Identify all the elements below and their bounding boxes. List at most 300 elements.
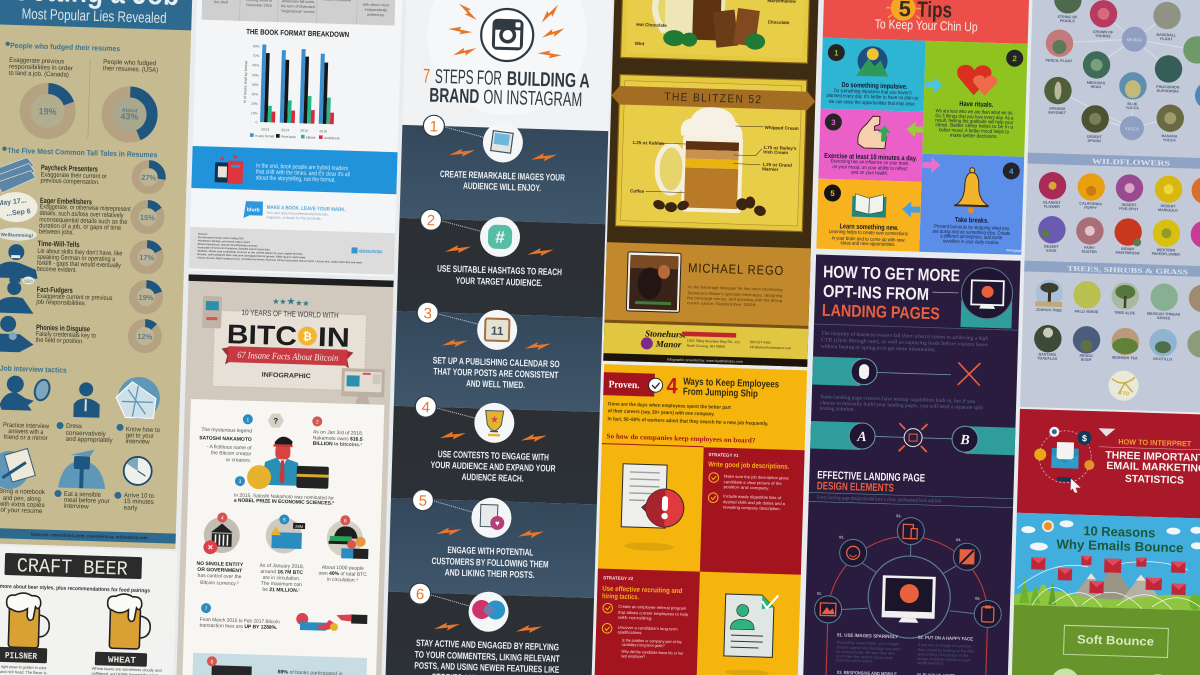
- sources block: Pew Research Center, book reading 2016: [198, 236, 244, 240]
- text: fact 5: As of January 2018,: [260, 563, 304, 570]
- plant labels: wildflowers: SAGE: [1046, 249, 1057, 253]
- step 2: USE SUITABLE HASHTAGS TO REACH: [437, 262, 562, 277]
- text: tactic 2: and appropriately: [66, 436, 113, 444]
- subtitle: Most Popular Lies Revealed: [21, 6, 167, 27]
- text: canada stat: Exaggerate previous: [9, 57, 65, 66]
- text: tactic 3: [116, 424, 160, 446]
- fact 6 icon: 6: [344, 518, 347, 524]
- chart legend: Audiobook: [324, 136, 340, 140]
- chart legend: Print book: [281, 135, 296, 139]
- plant labels: wildflowers: DESERT: [1044, 245, 1060, 249]
- icon: fact fudger figure: SEO: [24, 278, 33, 284]
- panel: instagram: [385, 0, 614, 675]
- fact 5 icon: 5: [283, 517, 286, 523]
- plant labels: succulents: PENCIL PLANT: [1046, 58, 1073, 63]
- text: usa stat: [103, 59, 158, 74]
- donut: 43 percent: About: [122, 108, 138, 114]
- node numbers: [817, 512, 983, 601]
- plant labels: wildflowers: BLANKET: [1043, 200, 1062, 205]
- title: [683, 377, 780, 400]
- title: [822, 262, 960, 324]
- step 5: CUSTOMERS BY FOLLOWING THEM: [431, 555, 549, 570]
- icon: resume check: [723, 594, 778, 675]
- wood bio panel: [604, 242, 811, 329]
- icon: man with mirror: [0, 375, 52, 411]
- card: hot chocolate: Chocolate: [768, 19, 790, 25]
- step 1: 1: [429, 118, 438, 135]
- donut: 17 percent: [133, 244, 160, 271]
- step 4: AUDIENCE REACH.: [462, 471, 524, 484]
- plant labels: wildflowers: DESERT: [1121, 203, 1137, 207]
- button: soft bounce: [1064, 625, 1168, 657]
- sources block: Association of American Publishers, StatShot annual report data: [198, 246, 270, 251]
- icon: phone: [202, 296, 222, 328]
- heading: bitcoin: ₿: [303, 331, 312, 343]
- callout text: In the end, book people are hybrid readers: [256, 162, 348, 172]
- text: tactic 6: [114, 492, 155, 512]
- plant labels: wildflowers: WESTERN: [1157, 248, 1176, 253]
- fact 3: In 2015, Satoshi Nakamoto was nominated for: [234, 493, 334, 502]
- plant labels: succulents: HEAD: [1091, 85, 1101, 89]
- node 4: [953, 543, 981, 571]
- strategy 2 red cell: Uncover a candidate's long-term: [618, 625, 678, 632]
- section heading: [817, 469, 925, 495]
- plant labels: wildflowers: INDIAN: [1121, 247, 1134, 251]
- text: fact 6: About 1000 people: [322, 565, 364, 572]
- sources band: [0, 527, 176, 544]
- contact: North Conway, NH 03860: [687, 344, 725, 349]
- proven tag: [603, 372, 655, 397]
- icon: welcoming figure: [0, 227, 39, 279]
- stars: [272, 296, 310, 308]
- a b test graphic: [810, 420, 1015, 455]
- blurb logo and slogan: blurb: [247, 207, 260, 214]
- text: usa stat: their resumes. (USA): [103, 65, 158, 74]
- bar chart: 20%: [251, 102, 258, 106]
- fact 2: 2: [316, 419, 319, 425]
- text: fact 6: own 40% of total BTC: [318, 571, 367, 578]
- bar chart: 2014: [281, 128, 289, 132]
- teal bar with mouse to cross: [812, 357, 980, 390]
- donut: 43 percent: [106, 91, 153, 138]
- text: fact 4: Bitcoin currency.³: [200, 580, 239, 587]
- step 5: ♥: [495, 519, 500, 528]
- plant labels: trees: BUSH: [1081, 358, 1092, 362]
- plant labels: trees: JOSHUA TREE: [1036, 308, 1062, 313]
- step 2: YOUR TARGET AUDIENCE.: [456, 275, 543, 288]
- element descriptions: target audience.: [917, 661, 944, 666]
- tip 1: 1: [834, 49, 839, 58]
- icon: date bubble: [0, 191, 38, 223]
- strategy 1 red cell: [700, 447, 805, 575]
- sources block: Sources:: [198, 233, 208, 236]
- fact 4 icon: 4: [221, 516, 224, 522]
- stats table: the term of illustrated: [281, 4, 315, 9]
- step 3: SET UP A PUBLISHING CALENDAR SO: [433, 354, 560, 369]
- arrow: blue: [902, 201, 920, 218]
- node numbers: 02.: [839, 535, 844, 540]
- strategy 1 red cell: STRATEGY #1: [708, 452, 739, 458]
- tip 2: better mood. A better mood helps to: [939, 127, 1009, 135]
- text: tactic 1: friend or a mirror: [4, 434, 49, 442]
- fact 2: BILLION in bitcoins.¹: [313, 441, 362, 448]
- plant labels: succulents: [1043, 14, 1182, 146]
- icon: clock sun: [1042, 520, 1054, 532]
- heading plate: craft beer: CRAFT BEER: [16, 555, 128, 582]
- content sheet: [182, 399, 384, 675]
- tip 2: Have rituals.: [959, 101, 993, 109]
- title: LANDING PAGES: [822, 301, 940, 323]
- item: time will tells: Lie about skills they don't have, like: [37, 248, 123, 257]
- stats table: "Inspirational" section: [281, 9, 315, 14]
- coffee beans: [652, 194, 768, 218]
- stats table: the shelf: [214, 0, 228, 4]
- tip 5: Learning helps to create new connections: [829, 229, 908, 237]
- node numbers: 03.: [896, 514, 902, 518]
- step 2: #: [495, 228, 506, 247]
- hexagon question mark: [268, 413, 284, 428]
- item: phonies in disguise: the field or position.: [36, 337, 84, 345]
- hills: [1014, 590, 1200, 611]
- title: 7: [423, 65, 430, 88]
- contact: 800 527-4161: [750, 340, 771, 345]
- item: fact fudgers: [35, 285, 113, 308]
- fact 5 icon: 29M: [295, 524, 303, 529]
- tip 3: Exercising has an influence on your brain,: [830, 158, 910, 167]
- fact 3: 3: [238, 479, 242, 485]
- drink labels: Coffee: [630, 188, 645, 194]
- item: paycheck presenters: previous compensation.: [40, 177, 100, 186]
- plant labels: succulents: YUCCA: [1163, 138, 1176, 143]
- credit strip: [603, 353, 807, 367]
- label: wheat: WHEAT: [108, 655, 137, 666]
- bio: [687, 284, 783, 308]
- bio: As the Beverage Manager he has been developing: [688, 284, 783, 292]
- plants: trees: [1034, 279, 1200, 358]
- fact 1: 1: [246, 417, 250, 423]
- item: eager embellishers: [39, 196, 131, 238]
- plant labels: trees: PALO VERDE: [1075, 309, 1099, 314]
- step 2: [419, 209, 564, 289]
- icon: monitor: [341, 368, 385, 404]
- sources band: Sources: newstimes.com, newswire.ca, edstudent.com: [31, 532, 148, 540]
- plant labels: trees: TREE ALOE: [1114, 311, 1136, 315]
- title: BUILDING A: [507, 68, 590, 93]
- envelopes: [1030, 554, 1187, 596]
- item: paycheck presenters: [40, 163, 108, 186]
- panel: stonehurst beverages: [603, 0, 819, 367]
- step 5: ENGAGE WITH POTENTIAL: [447, 544, 534, 558]
- text: tactic 3: get to your: [126, 432, 155, 440]
- strategy 1 red cell: Write good job descriptions.: [708, 461, 789, 471]
- plant labels: succulents: PLANT: [1160, 37, 1173, 41]
- subheading: To Keep Your Chin Up: [874, 16, 978, 34]
- stats table: December 2016: [246, 3, 272, 8]
- strategy 1 red cell: Include easily digestible lists of: [723, 493, 782, 500]
- bio: room since September 2008.: [687, 300, 757, 307]
- stars: ★: [279, 297, 287, 306]
- label: infographic: INFOGRAPHIC: [262, 372, 311, 380]
- element descriptions: 02. PUT ON A HAPPY FACE: [918, 635, 973, 642]
- step 5: 5: [418, 493, 427, 510]
- plant labels: succulents: BASEBALL: [1156, 33, 1177, 37]
- icon: envelope orbit: [1033, 426, 1115, 494]
- step 4: USE CONTESTS TO ENGAGE WITH: [438, 448, 549, 462]
- bar chart: 40%: [252, 83, 259, 87]
- element descriptions: image should be similar to your: [917, 657, 971, 662]
- plant labels: wildflowers: DUSTER: [1082, 250, 1097, 254]
- fact 4 icon: [203, 512, 240, 555]
- plant labels: succulents: EUPHORBIA: [1157, 89, 1179, 94]
- drink labels: [630, 121, 799, 198]
- text: tactic 5: Eat a sensible: [64, 491, 101, 499]
- panel: getting a job: [0, 0, 193, 549]
- title plate: [212, 310, 367, 391]
- panel: 5 tips: [816, 0, 1030, 255]
- element descriptions: If you use an image of a person,: [918, 643, 972, 649]
- heading: bitcoin: IN: [317, 322, 350, 353]
- text: tactic 2: [56, 422, 114, 444]
- sign: the blitzen 52: [611, 86, 816, 110]
- strategy 2 red cell: last employer?: [621, 653, 646, 659]
- item: eager embellishers: inconsequential details such as the: [39, 216, 128, 226]
- fact 2: [312, 416, 364, 448]
- strategy 1 red cell: desired skills and job duties and a: [723, 499, 786, 506]
- icon: clock: [123, 457, 152, 485]
- strategy 1 red cell: position and company.: [723, 484, 770, 491]
- item: paycheck presenters: Paycheck Presenters: [41, 163, 98, 174]
- plant labels: succulents: YUCCA: [1126, 106, 1139, 110]
- text: tactic 1: Practice interview: [3, 422, 49, 430]
- item: phonies in disguise: [36, 323, 96, 346]
- button: soft bounce: Soft Bounce: [1077, 632, 1155, 649]
- plants: succulents: [1043, 0, 1200, 136]
- text: canada stat: [9, 57, 74, 79]
- element descriptions: should support the message you want: [837, 645, 902, 651]
- hexagon question mark: ?: [273, 417, 278, 426]
- fact 7: [199, 603, 280, 631]
- text: beer notes: Wheat beers are sometimes cloudy and: [92, 667, 162, 673]
- bar chart: 2016: [319, 129, 327, 134]
- band: trees shrubs grass: TREES, SHRUBS & GRASS: [1067, 265, 1188, 276]
- section heading: EFFECTIVE LANDING PAGE: [817, 469, 925, 485]
- step 2: 2: [427, 212, 435, 229]
- strategy 2 red cell: with recruiting.: [618, 615, 653, 621]
- icon: pilsner mug: [5, 593, 50, 648]
- contact: [687, 338, 792, 351]
- section heading: job interview tactics: Job Interview tactics: [0, 364, 67, 375]
- step 5: [410, 489, 551, 581]
- icon: monitor badge: [960, 267, 1013, 329]
- step 6: [407, 583, 562, 675]
- strategy 2 red cell: Use effective recruiting and: [602, 586, 682, 595]
- tip 5: [822, 184, 910, 248]
- title: [1056, 522, 1184, 555]
- plant labels: wildflowers: [1042, 200, 1182, 257]
- panel: email bounce: [1011, 513, 1200, 675]
- step 3: AND WELL TIMED.: [466, 377, 525, 390]
- question: So how do companies keep employees on board?: [606, 432, 756, 445]
- plant labels: trees: MEXICAN THREAD: [1147, 312, 1181, 317]
- bar chart: 10%: [251, 111, 258, 115]
- stars: ★: [286, 296, 296, 308]
- hub: spurge: [1121, 26, 1147, 52]
- ribbon: [221, 346, 354, 368]
- plant labels: succulents: BAYONET: [1048, 111, 1067, 115]
- card: hot chocolate: [621, 0, 810, 63]
- header band: [0, 0, 193, 30]
- text: tactic 4: and pen, along: [3, 495, 41, 503]
- item: time will tells: speaking German or operating a: [37, 254, 116, 263]
- element descriptions: and smiling. The person in the: [917, 652, 968, 658]
- step 5: AND LIKING THEIR POSTS.: [445, 566, 535, 580]
- item: eager embellishers: between jobs.: [39, 228, 74, 236]
- intro text: without buying or opting in to get more information.: [821, 343, 936, 353]
- sources block: Statista, ebook and audiobook revenue in the United States by year, digital formats: [197, 250, 303, 256]
- bar chart: 70%: [253, 54, 259, 58]
- bar chart: 0: [255, 120, 258, 124]
- item: time will tells: [37, 239, 123, 275]
- bar chart: % of books read by format: [243, 61, 248, 103]
- node 2: [839, 539, 867, 567]
- logo: [641, 328, 686, 351]
- tip 1: planned every day. It's better to have no plan so: [826, 93, 919, 102]
- logo: ftd: [1108, 370, 1139, 401]
- step 4: ★: [490, 415, 499, 426]
- badge: sun: [886, 0, 923, 22]
- item: eager embellishers: Eager Embellishers: [40, 196, 92, 206]
- tip 4: Take breaks.: [955, 217, 989, 225]
- strategy 2 red cell: Create an employee referral program: [618, 604, 687, 611]
- kicker: HOW TO INTERPRET: [1118, 437, 1192, 448]
- tip 5: 5: [830, 189, 835, 198]
- chart legend: In any format: [255, 134, 274, 138]
- plant labels: trees: TOADFLAX: [1037, 356, 1058, 361]
- element descriptions: don't take the visitor's focus away: [836, 654, 893, 660]
- split test text: [820, 393, 984, 417]
- clouds: [1021, 519, 1200, 556]
- plant labels: succulents: DESERT: [1087, 135, 1103, 139]
- heading: bitcoin: [226, 319, 350, 353]
- text: fact 4: [196, 561, 244, 587]
- text: tactic 6: 15 minutes: [124, 498, 155, 506]
- text: canada stat: to land a job. (Canada): [9, 70, 69, 79]
- strategy 2 red cell: that allows current employees to help: [618, 610, 689, 617]
- icon: money: [0, 157, 36, 194]
- step 4: [413, 396, 558, 485]
- drink labels: 1.25 oz Kahlua: [632, 140, 664, 146]
- tip 4: Venngage: [1006, 248, 1022, 253]
- photo: [626, 252, 681, 312]
- text: tactic 5: interview: [63, 503, 89, 510]
- bounce arcs: [1017, 558, 1200, 611]
- label: pilsner: [0, 646, 47, 663]
- strategy 2 red cell: [595, 569, 700, 675]
- strategy 1 red cell: revealing company description.: [723, 504, 781, 511]
- a b test graphic: A: [856, 430, 867, 445]
- plant labels: succulents: SPOON: [1088, 139, 1101, 143]
- bio: the beverage menus, and assisting with the dining: [687, 295, 782, 303]
- tip 3: and on your health.: [851, 170, 888, 177]
- text: tactic 4: Bring a notebook: [0, 488, 46, 496]
- text: fact 5: The maximum can: [261, 581, 302, 588]
- logo: Manor: [655, 339, 682, 349]
- donut: 27 percent: [135, 164, 162, 191]
- panel: book format: [189, 0, 403, 277]
- item: eager embellishers: duration of a job, or gaps of time: [39, 222, 122, 232]
- card: blitzen 52: [607, 74, 816, 232]
- intro: In fact, 50–60% of workers admit that they search for a new job frequently.: [607, 416, 769, 427]
- intro: Gone are the days when employees spent the better part: [608, 401, 731, 411]
- tip 4: 4: [1009, 167, 1014, 176]
- bio: Stonehurst Manor's specialty beverages, designing: [687, 290, 782, 298]
- element descriptions: they should be looking at the offer: [918, 648, 975, 654]
- ribbon: 67 Insane Facts About Bitcoin: [237, 351, 339, 364]
- tip 2: [935, 47, 1023, 141]
- plant labels: wildflowers: PAPERFLOWER: [1152, 252, 1180, 257]
- plant labels: trees: GRASS: [1157, 316, 1171, 320]
- sources block: Bowker, self-published titles and print and digital format growth, ISBN figures and trends: [197, 253, 306, 259]
- plant labels: succulents: BLUE: [1127, 102, 1138, 106]
- bar chart: 2013: [261, 128, 269, 132]
- label: pilsner: PILSNER: [5, 651, 38, 662]
- donut: 17 percent: 17%: [139, 253, 155, 262]
- text: tactic 6: Arrive 10 to: [124, 492, 154, 500]
- icon: welcoming figure: Wellkomming!: [0, 232, 34, 239]
- callout text: that shift with the times, and it's clear it's all: [256, 168, 350, 178]
- network lines: [1057, 12, 1198, 130]
- strategy 2 red cell: Why did the candidate leave his or her: [621, 649, 684, 656]
- text: tactic 3: interview: [125, 438, 150, 446]
- donut: 19 percent: [24, 88, 71, 134]
- plant labels: wildflowers: FLOWER: [1044, 204, 1060, 209]
- strategy 2 red cell: candidate's long-term goals?: [622, 642, 665, 648]
- text: tactic 4: [0, 488, 46, 515]
- text: fact 5: [259, 563, 304, 594]
- band: trees shrubs grass: [1024, 261, 1200, 278]
- donut: 12 percent: 12%: [137, 332, 153, 341]
- a b test graphic: B: [959, 433, 970, 448]
- node 3: [897, 517, 925, 545]
- bar chart: 60%: [252, 63, 259, 67]
- bar chart: 2015: [300, 129, 308, 133]
- title: 10 Reasons: [1083, 523, 1156, 540]
- element descriptions: from the call to action.: [836, 658, 873, 663]
- fact 3: [234, 476, 335, 507]
- band: wildflowers: WILDFLOWERS: [1092, 156, 1170, 168]
- plant labels: wildflowers: FIVE-SPOT: [1119, 207, 1139, 211]
- section heading: resumes: People who fudged their resumes: [10, 41, 120, 53]
- item: time will tells: Time-Will-Tells: [37, 239, 80, 249]
- plant labels: wildflowers: CALIFORNIA: [1079, 202, 1102, 206]
- step 6: 6: [416, 586, 424, 603]
- step 3: [415, 302, 561, 391]
- donut: 19 percent: 19%: [38, 106, 57, 117]
- step bands: [385, 125, 608, 675]
- bolts around icon: [447, 0, 567, 61]
- drink labels: 1.25 oz Grand: [762, 162, 792, 168]
- fact 1: - A fictitious name of: [207, 444, 252, 451]
- donut: 19 percent small: [133, 284, 159, 311]
- tip 5: Learn something new.: [839, 223, 899, 232]
- tip 1: Do something impulsive that you haven't: [834, 88, 912, 96]
- section text: Every landing page design should have a clean, professional look and feel: [817, 494, 942, 505]
- bottom circles: [1051, 668, 1172, 675]
- icon: instagram: [480, 8, 534, 62]
- tip 2: 2: [1012, 54, 1018, 63]
- tip 4: a different atmosphere, add some: [940, 233, 1002, 241]
- fact 3: a NOBEL PRIZE IN ECONOMIC SCIENCES.²: [234, 498, 334, 507]
